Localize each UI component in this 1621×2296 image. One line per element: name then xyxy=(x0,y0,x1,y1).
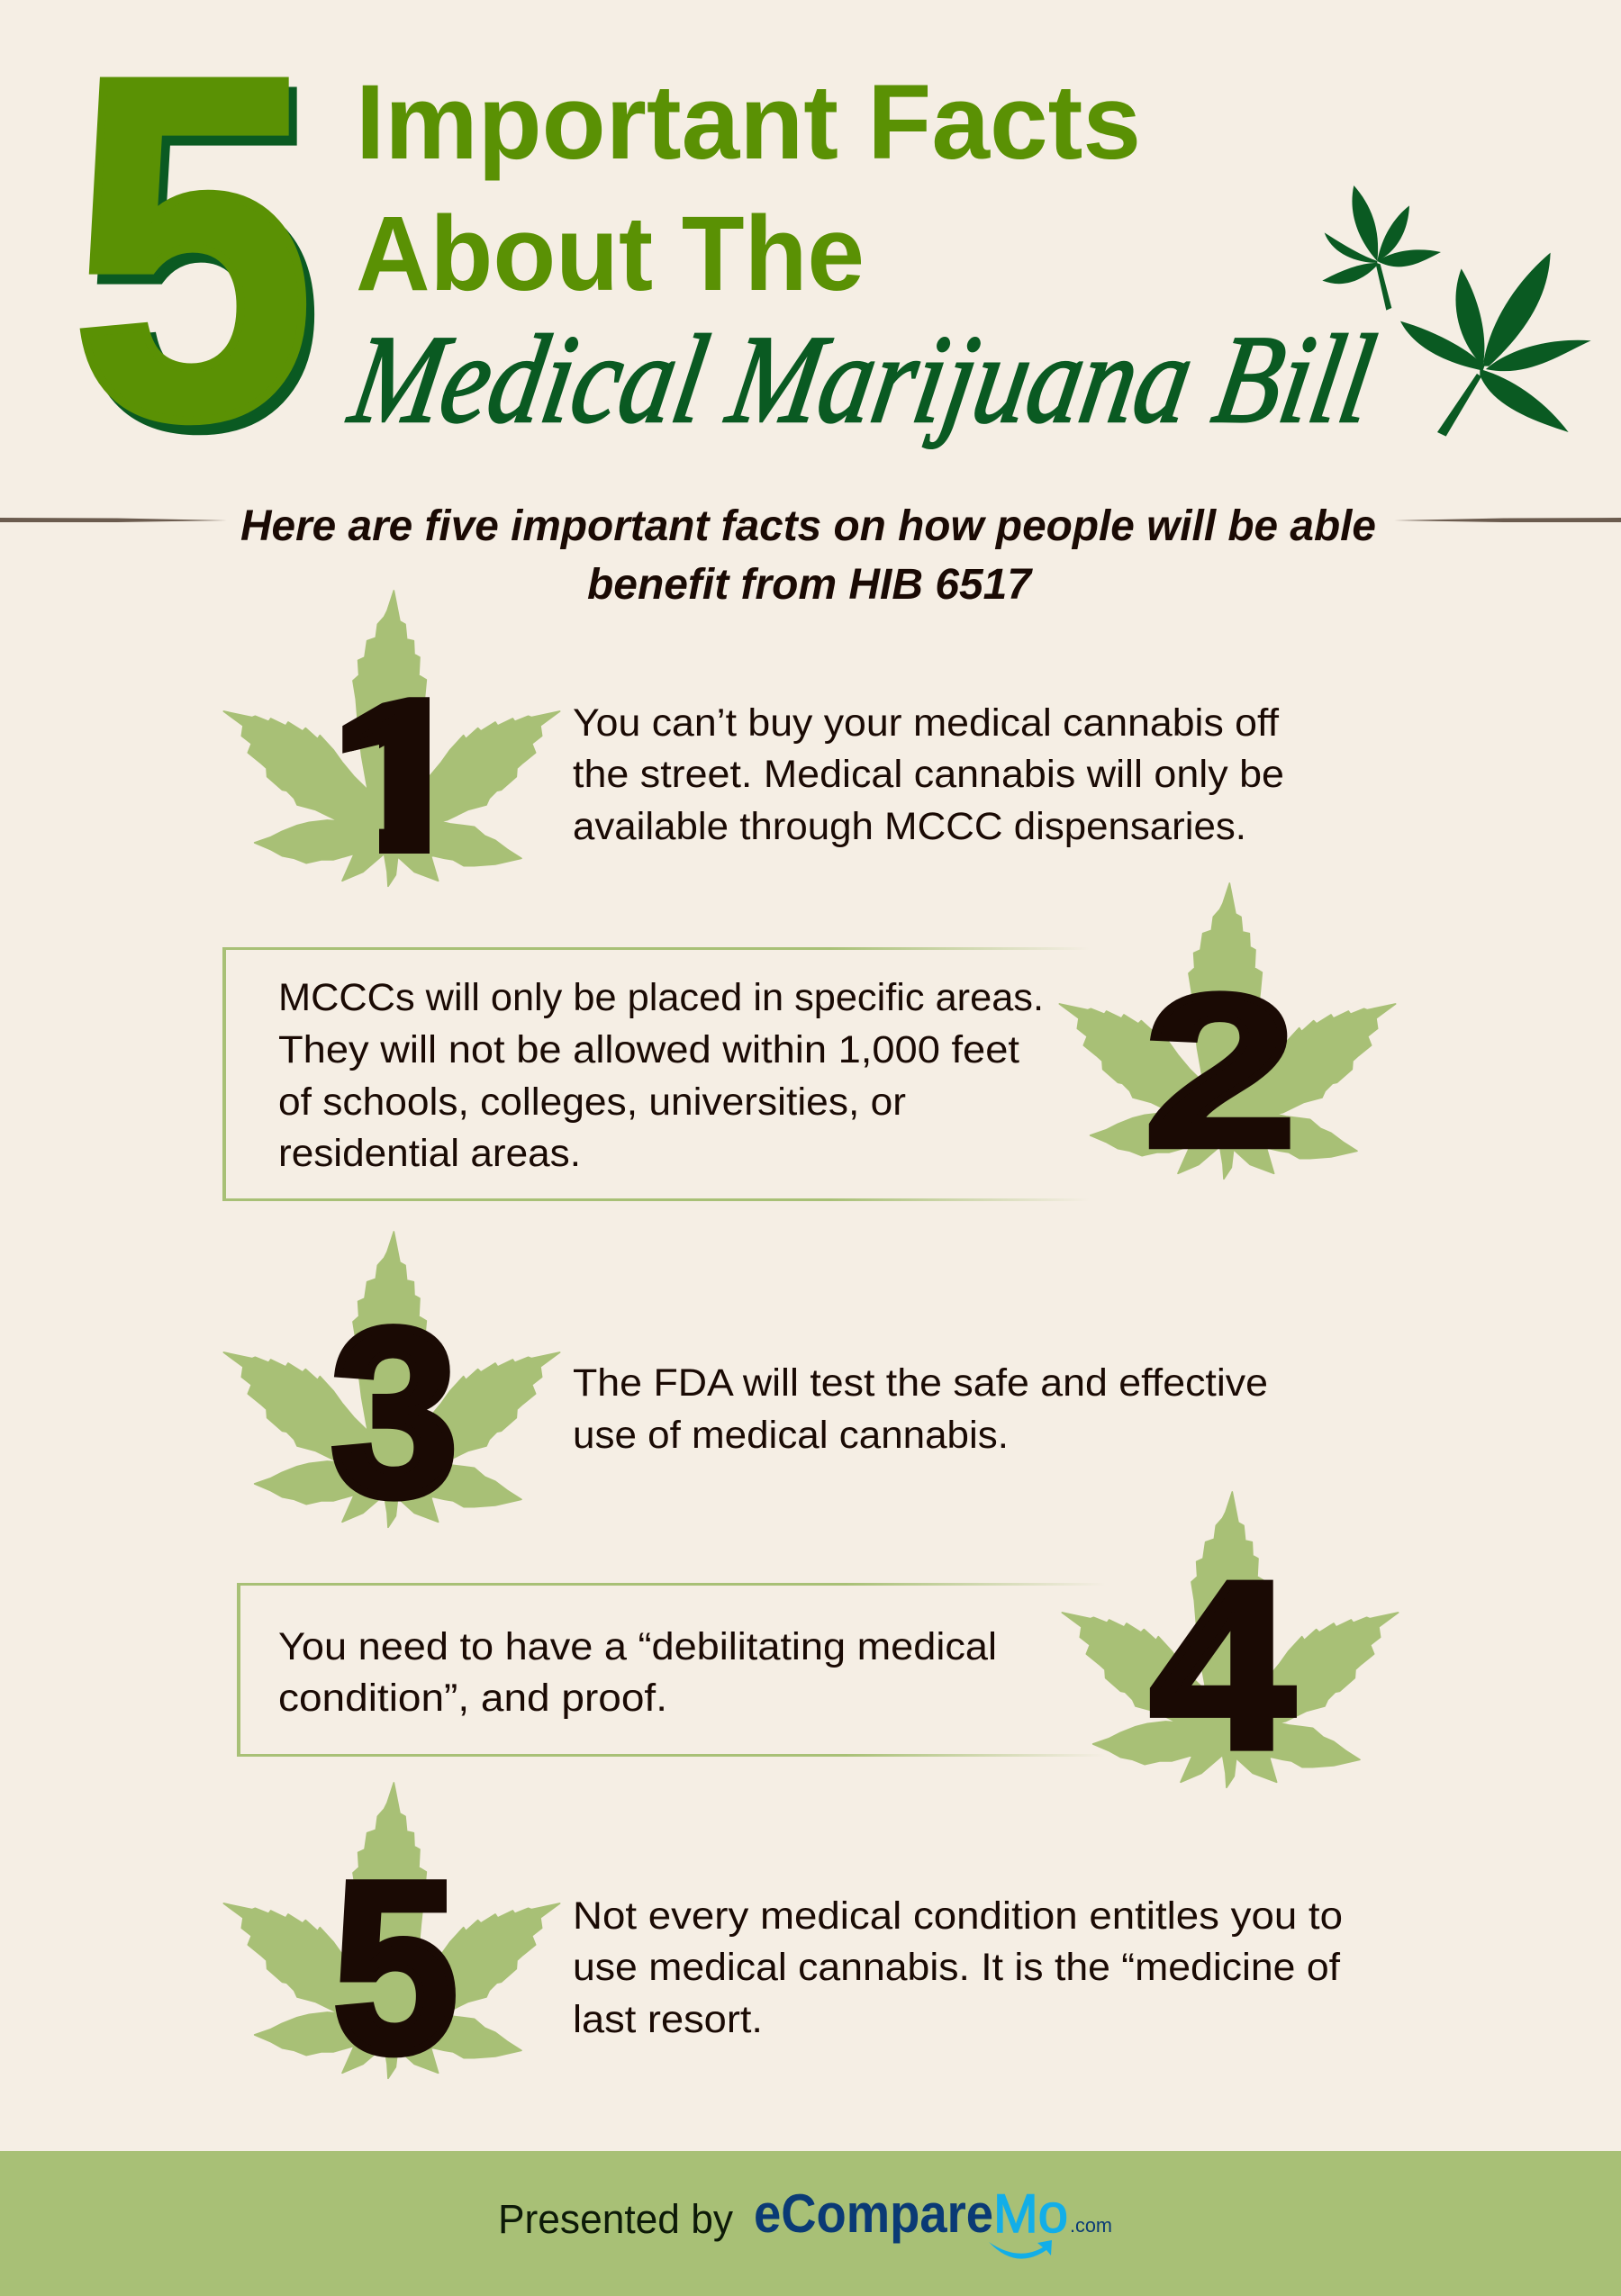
box outline xyxy=(222,947,1090,1201)
text: fact 1: available through MCCC dispensaries. xyxy=(573,805,1246,848)
text: fact 4: You need to have a “debilitating medical xyxy=(278,1625,997,1668)
text: fact 1 xyxy=(573,701,1284,848)
text: fact 5: last resort. xyxy=(573,1998,763,2041)
text: fact 2: MCCCs will only be placed in specific areas. xyxy=(278,976,1044,1019)
subtitle with side rules xyxy=(0,502,1621,609)
text: fact 5 xyxy=(573,1894,1343,2041)
box outline xyxy=(237,1583,1106,1757)
text: fact 3 xyxy=(573,1361,1268,1457)
text: fact 4 xyxy=(278,1625,997,1720)
icon: leaf with number 4 xyxy=(1062,1492,1399,1797)
logo: eCompareMo: eCompare xyxy=(754,2183,993,2244)
icon: large dark leaf xyxy=(1400,253,1591,437)
icon: leaf with number 5 xyxy=(223,1783,560,2103)
text: presented by: Presented by xyxy=(498,2196,733,2242)
panel: fact 5 xyxy=(223,1783,1343,2103)
title xyxy=(71,0,1384,529)
panel: fact 3 xyxy=(223,1232,1268,1546)
text: fact 1: You can’t buy your medical cannabis off xyxy=(573,701,1280,745)
icon: leaf with number 3 xyxy=(223,1232,560,1546)
panel: fact 2 xyxy=(222,883,1396,1201)
text: fact 3: The FDA will test the safe and effective xyxy=(573,1361,1268,1405)
icon: leaf with number 2: 2 xyxy=(1145,950,1296,1191)
text: fact 2: of schools, colleges, universities, or xyxy=(278,1080,906,1124)
icon: leaf with number 5: 5 xyxy=(333,1831,457,2103)
text: fact 2 xyxy=(278,976,1044,1175)
logo: eCompareMo: Mo xyxy=(993,2183,1068,2244)
icon: leaf with number 3: 3 xyxy=(331,1279,458,1546)
text: fact 1: the street. Medical cannabis will only be xyxy=(573,753,1284,796)
text: fact 3: use of medical cannabis. xyxy=(573,1414,1009,1457)
text: fact 5: Not every medical condition entitles you to xyxy=(573,1894,1343,1938)
footer band xyxy=(0,2151,1621,2296)
panel: fact 4 xyxy=(237,1492,1399,1797)
heading line: Important Facts: Important Facts xyxy=(356,63,1141,182)
icon: leaf with number 1: 1 xyxy=(334,657,475,908)
big numeral 5: 5 xyxy=(79,0,322,529)
text: fact 5: use medical cannabis. It is the “medicine of xyxy=(573,1946,1341,1989)
heading line: Medical Marijuana Bill: Medical Marijuana Bill xyxy=(340,309,1384,449)
logo: eCompareMo: .com xyxy=(1070,2214,1112,2237)
icon: leaf with number 1 xyxy=(223,591,560,908)
panel: fact 1 xyxy=(223,591,1284,908)
text: fact 2: They will not be allowed within 1,000 feet xyxy=(278,1028,1019,1071)
logo: eCompareMo xyxy=(754,2183,1112,2259)
heading line: About The: About The xyxy=(356,194,865,313)
icon: small dark leaf xyxy=(1322,185,1441,311)
subtitle with side rules: benefit from HIB 6517 xyxy=(587,561,1033,609)
icon: leaf with number 2 xyxy=(1059,883,1396,1191)
subtitle with side rules: Here are five important facts on how people will be able xyxy=(240,502,1376,550)
text: fact 2: residential areas. xyxy=(278,1132,581,1175)
text: fact 4: condition”, and proof. xyxy=(278,1677,667,1720)
icon: leaf with number 4: 4 xyxy=(1151,1534,1295,1797)
